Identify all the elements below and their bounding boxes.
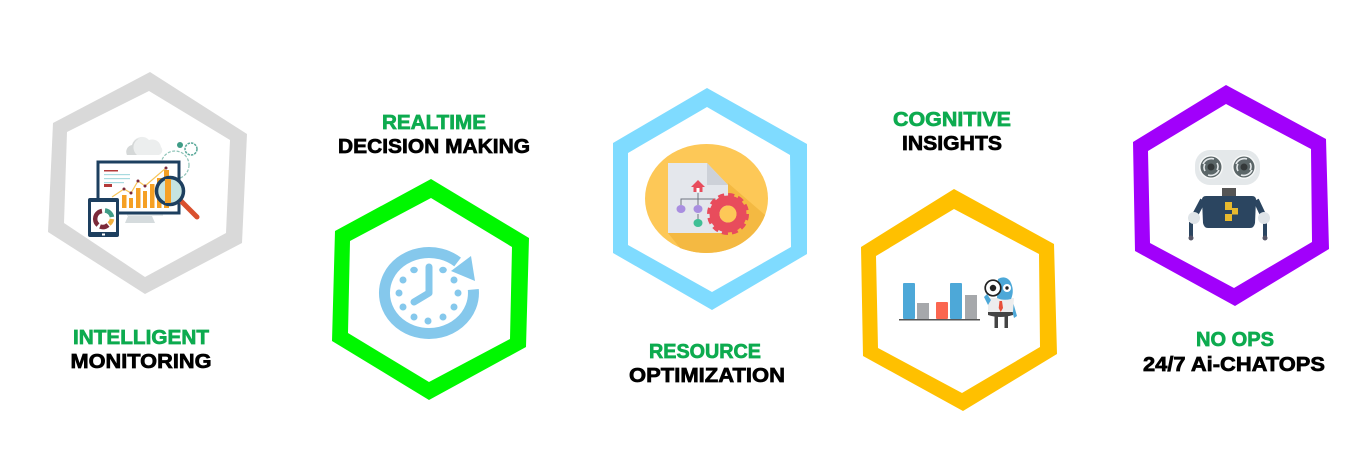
hexagon: gray: [48, 72, 247, 294]
heading: [1143, 329, 1325, 376]
panel: realtime decision making: [332, 112, 530, 400]
hexagon: green: [332, 179, 529, 400]
icon: bar chart with mascot: [899, 277, 1017, 328]
heading: [338, 112, 530, 158]
heading: OPTIMIZATION: [629, 365, 785, 387]
icon: clock: [384, 253, 475, 334]
heading: RESOURCE: [649, 341, 761, 363]
panel: resource optimization: [613, 88, 807, 387]
icon: document workflow gear: [645, 144, 768, 253]
hexagon: purple: [1133, 85, 1329, 306]
heading: NO OPS: [1196, 329, 1274, 351]
hexagon: amber: [861, 189, 1057, 411]
heading: [629, 341, 785, 387]
panel: no ops chatops: [1133, 85, 1329, 376]
heading: 24/7 Ai-CHATOPS: [1143, 354, 1325, 376]
heading: INTELLIGENT: [73, 327, 209, 349]
heading: COGNITIVE: [893, 109, 1011, 131]
heading: [70, 327, 212, 373]
panel: intelligent monitoring: [48, 72, 247, 373]
heading: MONITORING: [70, 351, 212, 373]
heading: [893, 109, 1011, 155]
panel: cognitive insights: [861, 109, 1057, 411]
icon: robot: [1188, 150, 1270, 240]
heading: DECISION MAKING: [338, 136, 530, 158]
heading: REALTIME: [382, 112, 486, 134]
hexagon: light blue: [613, 88, 807, 310]
icon: monitor analytics: [88, 137, 197, 237]
heading: INSIGHTS: [902, 133, 1002, 155]
